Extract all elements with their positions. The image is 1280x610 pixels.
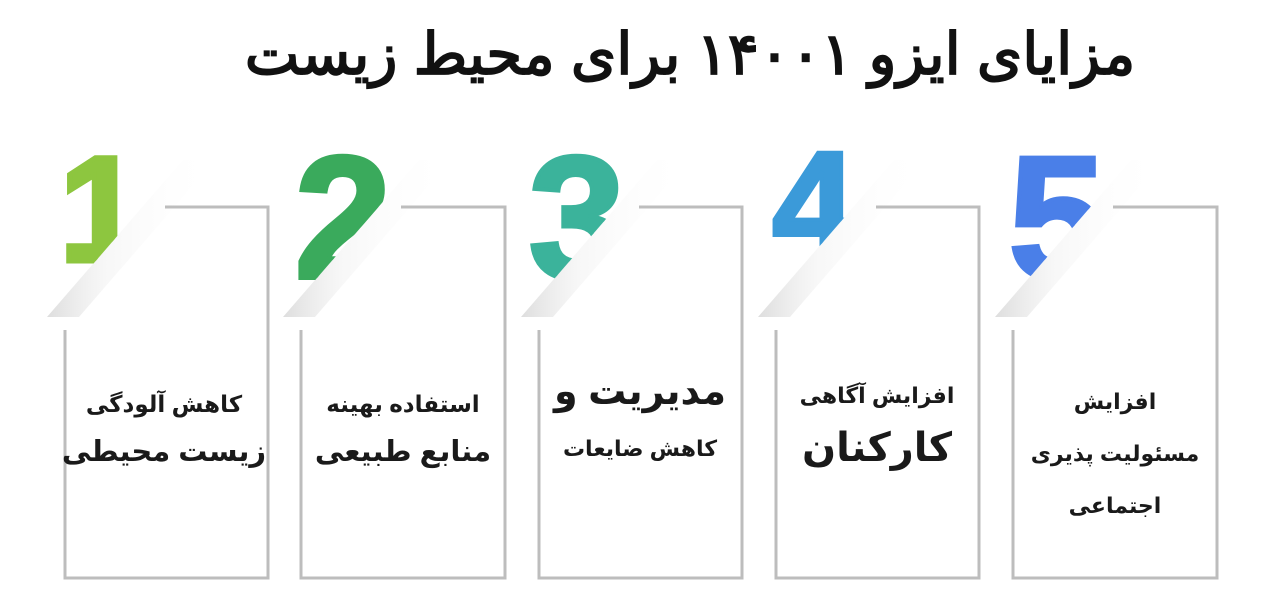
text: card 3: کاهش ضایعات xyxy=(563,436,717,461)
card 1: 1 xyxy=(59,125,143,293)
text: card 2: منابع طبیعی xyxy=(315,436,491,468)
card 5: 5 xyxy=(1008,121,1106,316)
text: card 2: استفاده بهینه xyxy=(326,391,480,417)
card 4 xyxy=(758,120,979,578)
text: card 4: افزایش آگاهی xyxy=(800,383,954,408)
card 1 xyxy=(47,125,268,578)
card 3: 3 xyxy=(528,121,626,316)
text: card 5: اجتماعی xyxy=(1069,493,1161,518)
text: card 5: مسئولیت پذیری xyxy=(1031,441,1199,466)
title: مزایای ایزو ۱۴۰۰۱ برای محیط زیست xyxy=(245,22,1135,87)
card 4: 4 xyxy=(772,120,856,288)
text: card 3: مدیریت و xyxy=(554,371,726,413)
card 2 xyxy=(283,121,505,578)
card 3 xyxy=(521,121,742,578)
text: card 1: زیست محیطی xyxy=(62,436,266,468)
text: card 4 xyxy=(800,382,954,471)
card 2: 2 xyxy=(294,121,392,316)
text: card 1: کاهش آلودگی xyxy=(86,391,242,417)
text: card 5: افزایش xyxy=(1074,389,1156,414)
text: card 1 xyxy=(62,390,266,468)
cards graphic xyxy=(47,150,1218,580)
text: card 5 xyxy=(1031,389,1199,518)
text: card 4: کارکنان xyxy=(802,426,952,470)
text: card 3 xyxy=(552,371,726,461)
text: card 2 xyxy=(315,391,491,468)
card 5 xyxy=(995,121,1217,578)
